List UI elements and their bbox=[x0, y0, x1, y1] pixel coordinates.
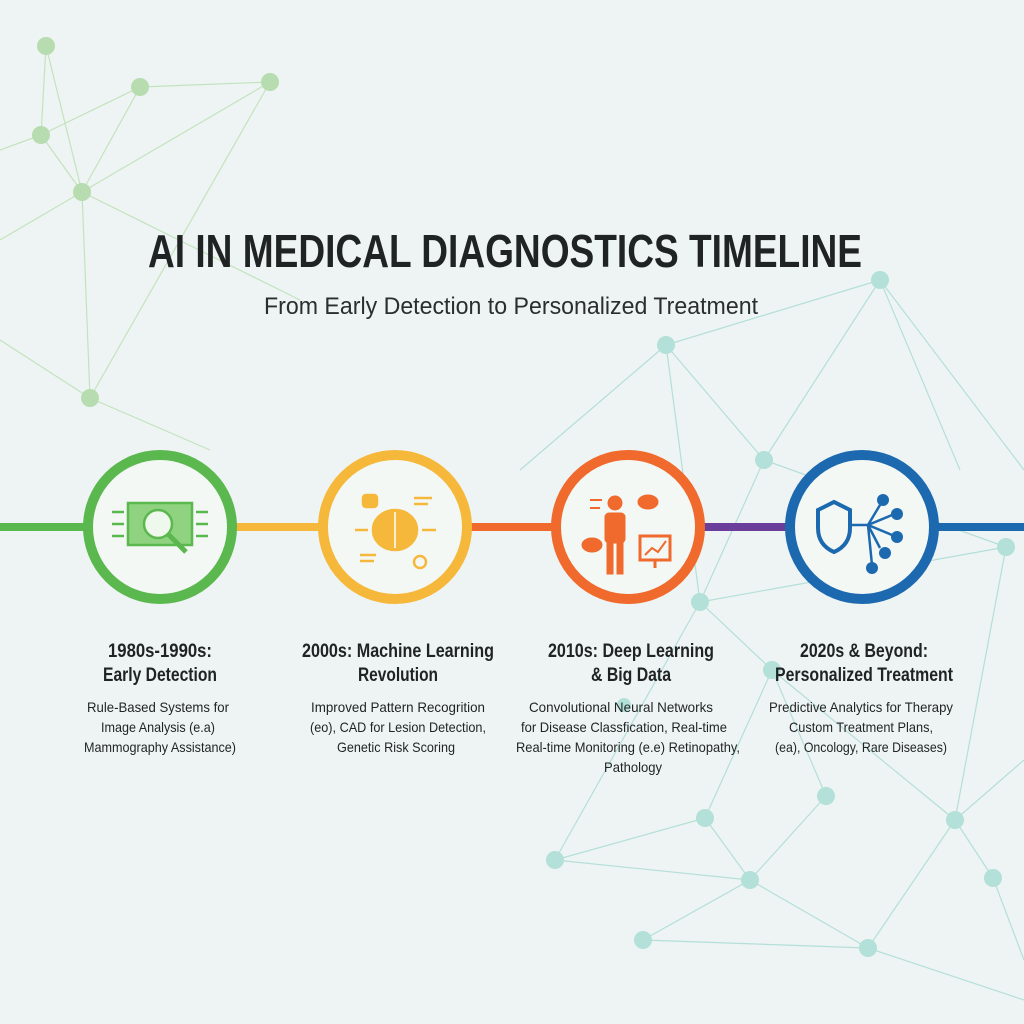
subtitle: From Early Detection to Personalized Treatment bbox=[264, 293, 758, 320]
milestone 1 text: Early Detection bbox=[103, 665, 217, 686]
milestone 3 text: 2010s: Deep Learning bbox=[548, 641, 714, 662]
milestone 2 text: Genetic Risk Scoring bbox=[337, 739, 455, 755]
icon: brain bbox=[355, 495, 436, 568]
milestone 4 text: Predictive Analytics for Therapy bbox=[769, 699, 953, 715]
milestone 3 text: for Disease Classfication, Real-time bbox=[521, 719, 727, 735]
timeline line bbox=[0, 523, 1024, 531]
milestone 1 text: Image Analysis (e.a) bbox=[101, 719, 215, 735]
milestone 2 text: 2000s: Machine Learning bbox=[302, 641, 494, 662]
milestone 2 text: Improved Pattern Recogrition bbox=[311, 699, 485, 715]
milestone 4 text: 2020s & Beyond: bbox=[800, 641, 928, 662]
milestone 1 text: Mammography Assistance) bbox=[84, 739, 236, 755]
milestone 1 text: Rule-Based Systems for bbox=[87, 699, 229, 715]
milestone 3 text: Convolutional Neural Networks bbox=[529, 699, 713, 715]
milestone 4 text bbox=[769, 641, 954, 755]
title: AI IN MEDICAL DIAGNOSTICS TIMELINE bbox=[148, 225, 862, 277]
milestone 1 circle: green bbox=[88, 455, 232, 599]
milestone 3 text: Pathology bbox=[604, 759, 662, 775]
network background right bbox=[520, 280, 1024, 1000]
milestone 3 circle: orange bbox=[556, 455, 700, 599]
milestone 4 text: Custom Treatment Plans, bbox=[789, 719, 933, 735]
icon: DNA shield with branches bbox=[818, 502, 892, 565]
milestone 2 text bbox=[302, 641, 494, 755]
milestone 1 text bbox=[84, 641, 236, 755]
milestone 4 text: (ea), Oncology, Rare Diseases) bbox=[775, 739, 947, 755]
icon: person with data bbox=[582, 495, 670, 574]
milestone 4 circle: blue bbox=[790, 455, 934, 599]
milestone 2 circle: yellow bbox=[323, 455, 467, 599]
milestone 2 text: Revolution bbox=[358, 665, 438, 686]
milestone 3 text: Real-time Monitoring (e.e) Retinopathy, bbox=[516, 739, 740, 755]
network background top-left bbox=[0, 46, 300, 450]
milestone 4 text: Personalized Treatment bbox=[775, 665, 954, 686]
milestone 3 text: & Big Data bbox=[591, 665, 671, 686]
milestone 3 text bbox=[516, 641, 740, 775]
milestone 1 text: 1980s-1990s: bbox=[108, 641, 212, 662]
icon: screen with magnifier bbox=[112, 503, 208, 552]
milestone 2 text: (eo), CAD for Lesion Detection, bbox=[310, 719, 486, 735]
